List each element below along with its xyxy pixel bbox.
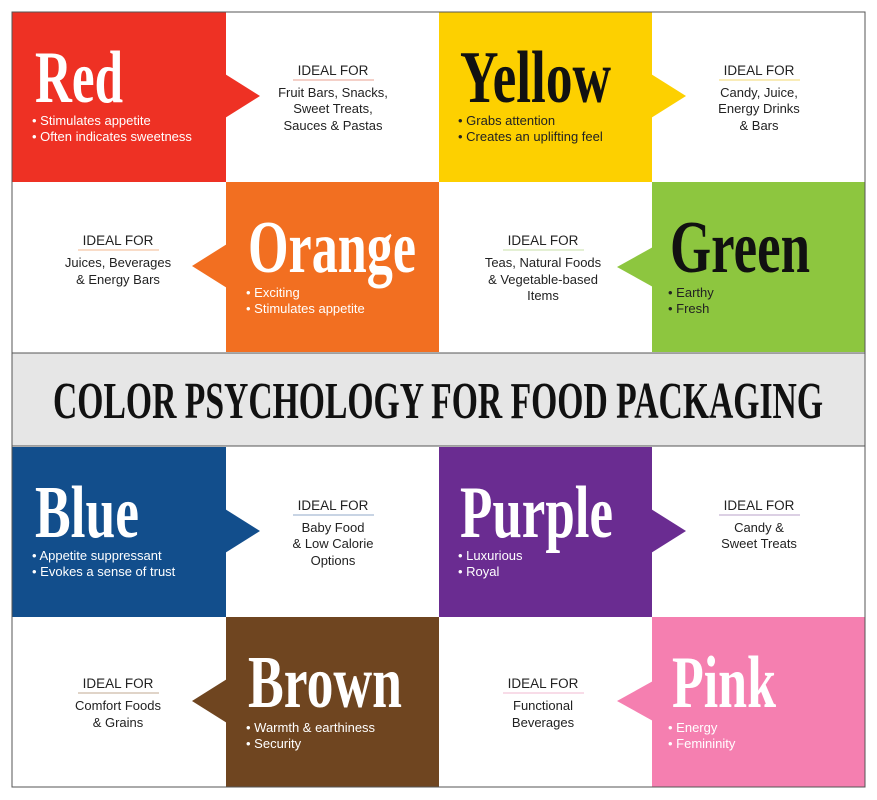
panel: brown ideal for: Comfort Foods xyxy=(75,698,161,713)
panel: green: Green xyxy=(670,207,810,289)
panel: red ideal for: Sauces & Pastas xyxy=(284,118,383,133)
panel: yellow ideal for: IDEAL FOR xyxy=(724,63,795,78)
panel: green ideal for xyxy=(485,233,602,303)
panel: red ideal for: Fruit Bars, Snacks, xyxy=(278,85,388,100)
panel: purple ideal for: Candy & xyxy=(734,520,784,535)
panel: brown ideal for: & Grains xyxy=(93,715,144,730)
panel: pink: • Energy xyxy=(668,720,718,735)
panel: red: • Often indicates sweetness xyxy=(32,129,192,144)
panel: blue: • Evokes a sense of trust xyxy=(32,564,176,579)
panel: pink ideal for xyxy=(503,676,584,730)
panel: yellow: • Grabs attention xyxy=(458,113,555,128)
panel: purple xyxy=(439,447,686,617)
panel: blue ideal for: & Low Calorie xyxy=(293,536,373,551)
panel: orange ideal for: & Energy Bars xyxy=(76,272,160,287)
panel: orange ideal for: IDEAL FOR xyxy=(83,233,154,248)
panel: blue: • Appetite suppressant xyxy=(32,548,162,563)
panel: yellow: Yellow xyxy=(460,37,611,119)
panel: green: • Fresh xyxy=(668,301,709,316)
panel: yellow ideal for: & Bars xyxy=(739,118,779,133)
panel: brown ideal for xyxy=(75,676,161,730)
panel: green xyxy=(617,182,865,352)
panel: blue ideal for: Baby Food xyxy=(302,520,364,535)
panel: orange xyxy=(192,182,439,352)
panel: purple: • Royal xyxy=(458,564,500,579)
title band xyxy=(12,353,865,446)
panel: brown xyxy=(192,617,439,787)
panel: brown: • Warmth & earthiness xyxy=(246,720,376,735)
panel: blue ideal for: Options xyxy=(311,553,356,568)
panel: purple: Purple xyxy=(460,472,613,554)
panel: brown: • Security xyxy=(246,736,302,751)
panel: purple ideal for: IDEAL FOR xyxy=(724,498,795,513)
panel: yellow xyxy=(439,12,686,182)
panel: blue: Blue xyxy=(35,472,139,554)
panel: green: • Earthy xyxy=(668,285,714,300)
panel: brown ideal for: IDEAL FOR xyxy=(83,676,154,691)
panel: green ideal for: IDEAL FOR xyxy=(508,233,579,248)
panel: red ideal for xyxy=(278,63,388,133)
panel: brown: Brown xyxy=(248,642,402,724)
panel: yellow ideal for xyxy=(718,63,800,133)
panel: purple: • Luxurious xyxy=(458,548,523,563)
panel: pink: Pink xyxy=(672,642,777,724)
panel: pink xyxy=(617,617,865,787)
panel: green ideal for: Teas, Natural Foods xyxy=(485,255,602,270)
panel: red ideal for: Sweet Treats, xyxy=(293,101,373,116)
panel: orange ideal for: Juices, Beverages xyxy=(65,255,172,270)
panel: yellow: • Creates an uplifting feel xyxy=(458,129,603,144)
panel: red xyxy=(12,12,260,182)
panel: green ideal for: Items xyxy=(527,288,559,303)
panel: purple ideal for: Sweet Treats xyxy=(721,536,797,551)
panel: orange: Orange xyxy=(248,207,416,289)
panel: red: • Stimulates appetite xyxy=(32,113,151,128)
panel: blue ideal for: IDEAL FOR xyxy=(298,498,369,513)
panel: yellow ideal for: Candy, Juice, xyxy=(720,85,798,100)
panel: orange: • Stimulates appetite xyxy=(246,301,365,316)
panel: pink ideal for: Beverages xyxy=(512,715,575,730)
panel: pink ideal for: IDEAL FOR xyxy=(508,676,579,691)
panel: orange: • Exciting xyxy=(246,285,300,300)
panel: red: Red xyxy=(35,37,123,119)
panel: blue ideal for xyxy=(293,498,374,568)
panel: pink ideal for: Functional xyxy=(513,698,573,713)
panel: green ideal for: & Vegetable-based xyxy=(488,272,598,287)
panel: pink: • Femininity xyxy=(668,736,736,751)
panel: yellow ideal for: Energy Drinks xyxy=(718,101,800,116)
panel: orange ideal for xyxy=(65,233,172,287)
panel: blue xyxy=(12,447,260,617)
panel: purple ideal for xyxy=(719,498,800,551)
panel: red ideal for: IDEAL FOR xyxy=(298,63,369,78)
